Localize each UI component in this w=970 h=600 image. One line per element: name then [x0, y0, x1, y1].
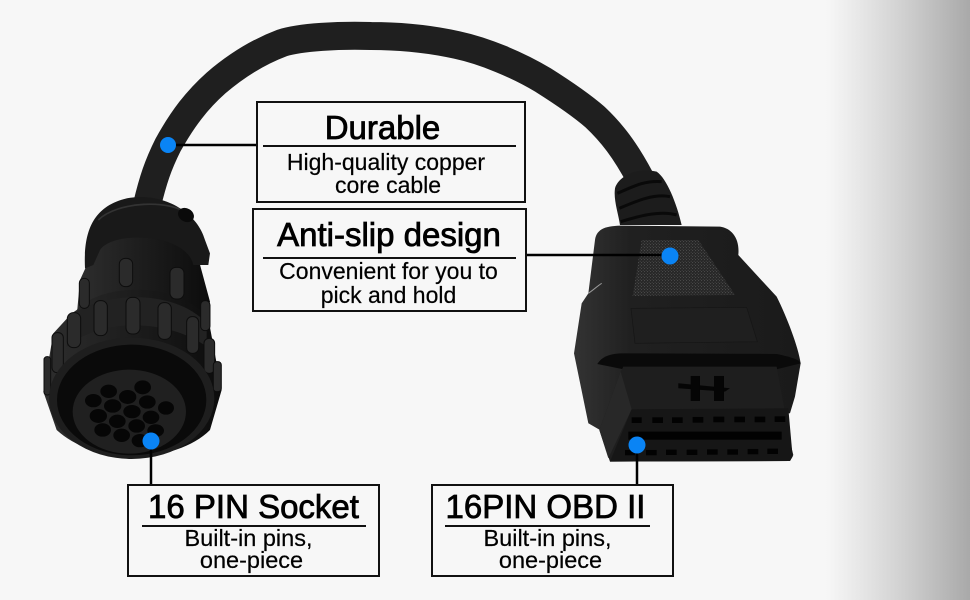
callout: Anti-slip design: Convenient for you to — [279, 258, 498, 284]
callout: Durable: High-quality copper — [287, 149, 485, 175]
callout: Durable: core cable — [335, 172, 441, 198]
grip ribs — [44, 258, 221, 395]
marker dot: durable — [160, 137, 176, 153]
callout: 16 PIN Socket — [127, 484, 380, 577]
right connector: OBD II — [574, 170, 801, 462]
left connector: 16 pin socket — [43, 197, 222, 459]
socket pin holes — [85, 380, 174, 447]
callout: 16 PIN Socket: one-piece — [200, 547, 303, 573]
callout: 16PIN OBD II: Built-in pins, — [484, 525, 612, 551]
marker dot: anti-slip — [662, 248, 678, 264]
callout: Anti-slip design: Anti-slip design — [277, 216, 501, 253]
connector line: OBD — [636, 446, 638, 485]
connector line: socket — [150, 444, 152, 485]
callout: 16PIN OBD II: 16PIN OBD II — [446, 488, 645, 525]
marker dot: OBD — [628, 436, 646, 454]
marker dot: socket — [142, 432, 160, 450]
cable — [147, 36, 640, 205]
callout: 16PIN OBD II: one-piece — [499, 547, 602, 573]
callout: Durable: Durable — [325, 109, 440, 146]
callout: Durable — [256, 101, 526, 203]
callout: 16 PIN Socket: 16 PIN Socket — [148, 488, 359, 525]
connector line: anti-slip — [526, 254, 670, 256]
anti-slip mesh panel — [633, 240, 735, 296]
callout: 16PIN OBD II — [431, 484, 674, 577]
connector line: durable — [168, 144, 256, 146]
callout: Anti-slip design — [252, 208, 527, 312]
callout: 16 PIN Socket: Built-in pins, — [184, 525, 312, 551]
callout: Anti-slip design: pick and hold — [321, 282, 456, 308]
OBD plug — [599, 367, 793, 462]
